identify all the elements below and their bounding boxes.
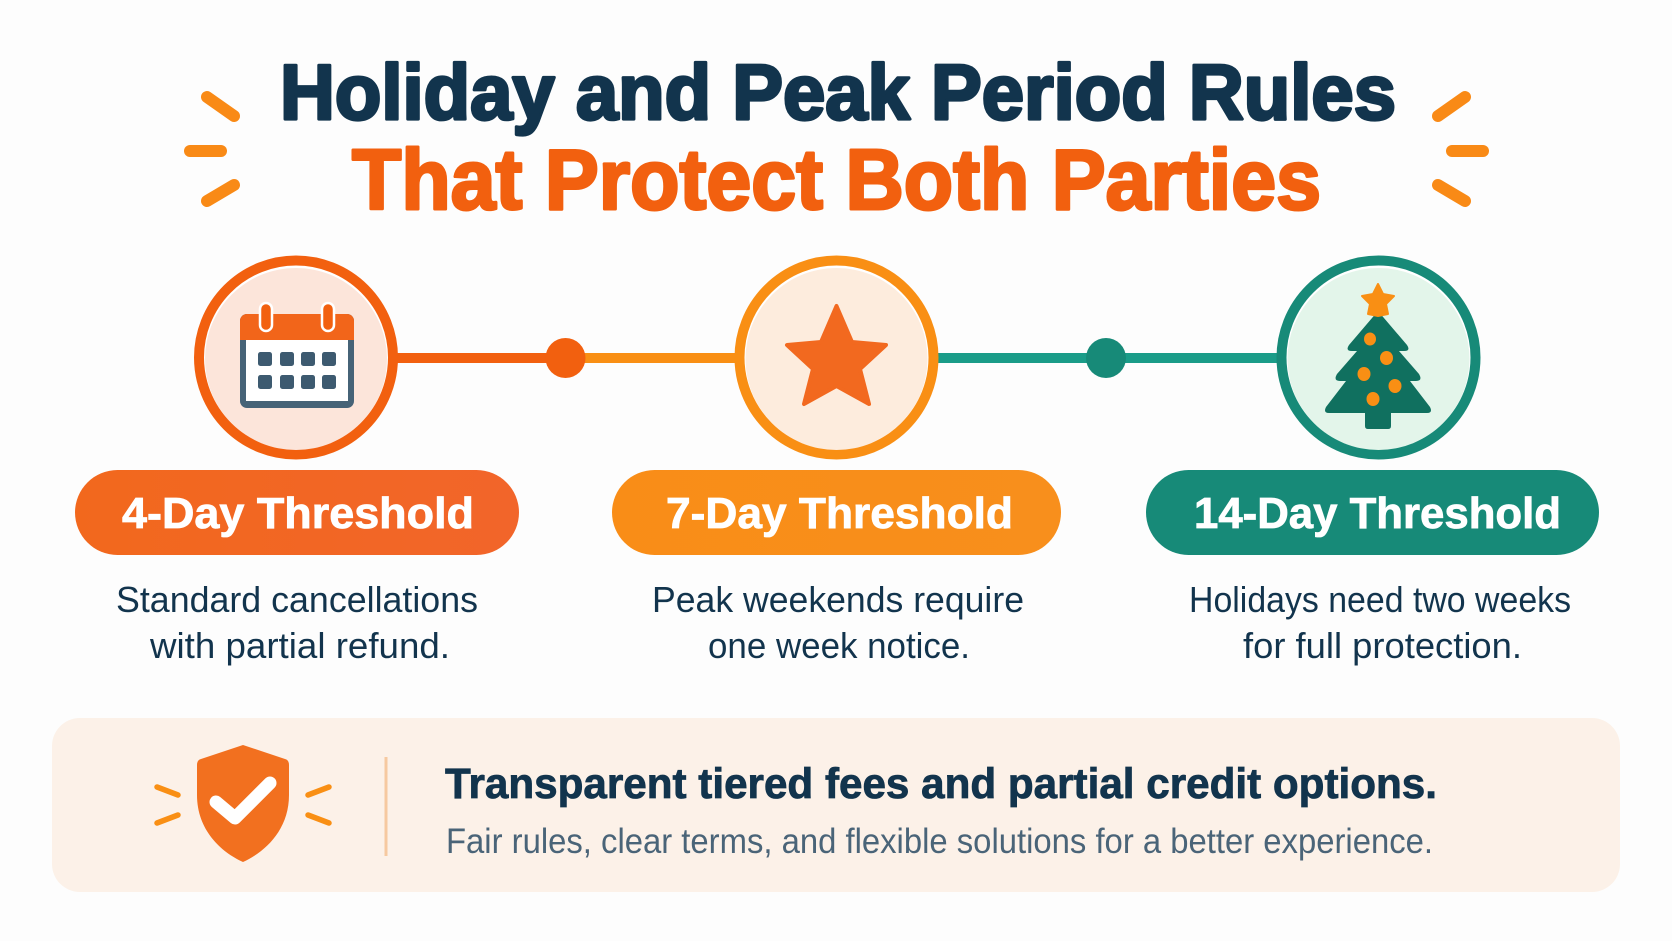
text: step 2 description: [652, 579, 1024, 666]
text: step 1 description: with partial refund.: [149, 625, 450, 666]
icon: shield with check: [157, 745, 329, 862]
step 3: tree circle: [1282, 260, 1476, 454]
icon: calendar: [240, 303, 354, 408]
icon: left title rays: [190, 97, 234, 201]
step 2: star circle: [740, 260, 934, 454]
title: [280, 48, 1396, 228]
text: step 1 description: [116, 579, 478, 666]
icon: christmas tree: [1325, 284, 1431, 429]
text: step 2 description: Peak weekends require: [652, 579, 1024, 620]
step 1: calendar circle: [199, 260, 393, 454]
title line 2: That Protect Both Parties: [352, 133, 1321, 228]
timeline connector: [396, 338, 1280, 378]
panel: summary: [52, 718, 1620, 892]
text: step 3 description: for full protection.: [1243, 625, 1522, 666]
pill: 7-day threshold: [612, 470, 1061, 555]
text: summary heading: Transparent tiered fees and partial credit options.: [445, 760, 1437, 808]
icon: star: [787, 306, 886, 404]
text: step 2 description: one week notice.: [708, 625, 970, 666]
pill: 4-day threshold: 4-Day Threshold: [122, 489, 474, 538]
pill: 4-day threshold: [75, 470, 519, 555]
text: step 3 description: Holidays need two weeks: [1189, 579, 1571, 620]
title line 1: Holiday and Peak Period Rules: [280, 48, 1396, 136]
icon: right title rays: [1438, 97, 1483, 201]
pill: 14-day threshold: 14-Day Threshold: [1194, 489, 1561, 538]
text: step 3 description: [1189, 579, 1571, 666]
pill: 7-day threshold: 7-Day Threshold: [666, 489, 1013, 538]
text: step 1 description: Standard cancellations: [116, 579, 478, 620]
pill: 14-day threshold: [1146, 470, 1599, 555]
text: summary subheading: Fair rules, clear terms, and flexible solutions for a better experience.: [446, 822, 1433, 861]
